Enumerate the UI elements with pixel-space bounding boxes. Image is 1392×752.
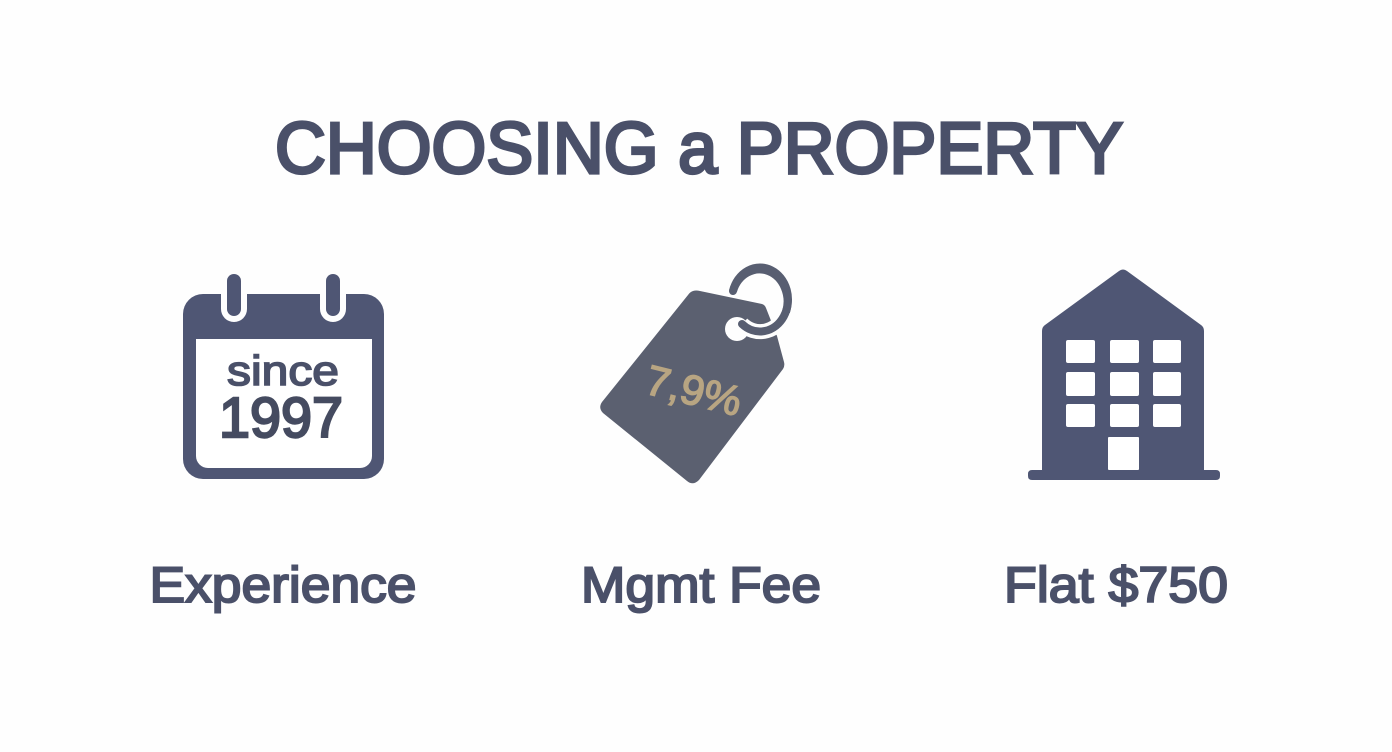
icon: price tag 7,9%: 7,9% [641, 356, 747, 425]
title: CHOOSING a PROPERTY [275, 109, 1123, 189]
icon: building [1028, 270, 1220, 480]
icon: calendar since 1997 [183, 268, 384, 479]
icon: calendar since 1997: 1997 [219, 386, 343, 450]
label: management fee: Mgmt Fee [581, 557, 821, 613]
icon: calendar since 1997: since [227, 347, 339, 394]
label: flat fee: Flat $750 [1004, 557, 1228, 613]
icon: price tag 7,9% [600, 267, 788, 483]
label: experience: Experience [150, 557, 416, 613]
